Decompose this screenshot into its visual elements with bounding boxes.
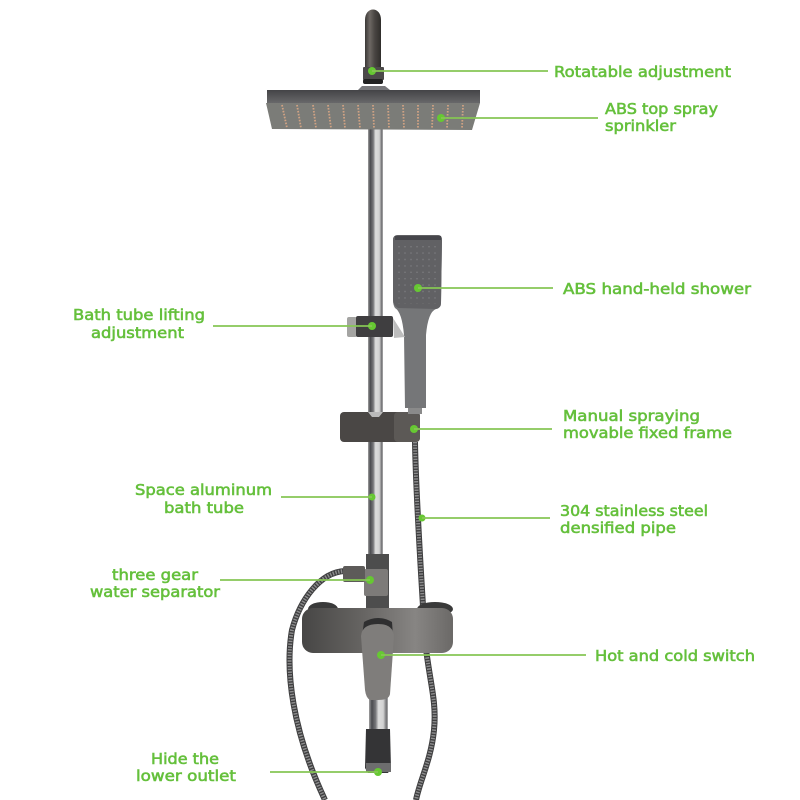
callout: movable fixed frame [410,407,732,442]
callout: top spray sprinkler: ABS top spray [605,100,718,118]
top spray head [266,90,480,130]
callout: stainless steel pipe: 304 stainless steel [560,502,708,520]
callout: hide the lower outlet: lower outlet [136,767,236,785]
callout: space aluminum bath tube [135,481,376,517]
callout: top spray sprinkler [437,100,718,135]
callout: rotatable adjustment: Rotatable adjustment [554,63,731,81]
callout: rotatable adjustment [368,63,731,81]
callout: hot and cold switch: Hot and cold switch [595,647,755,665]
callout: stainless steel pipe: densified pipe [560,519,676,537]
callout: stainless steel pipe [418,502,708,537]
shower column illustration [266,10,480,800]
hand shower [393,235,442,408]
callout: bath tube lifting adjustment: adjustment [91,324,184,342]
callout: top spray sprinkler: sprinkler [605,117,677,135]
mixer body [302,602,453,653]
arm collar [358,67,390,90]
callout: water separator [90,566,374,601]
callout: space aluminum bath tube: Space aluminum [135,481,272,499]
right hose [415,442,435,800]
callout: hand-held shower [414,280,752,298]
lifting clip [347,316,405,338]
callout: movable fixed frame: movable fixed frame [563,424,732,442]
callout: movable fixed frame: Manual spraying [563,407,700,425]
water separator [343,554,389,610]
callout: hot and cold switch [377,647,755,665]
callout: hand-held shower: ABS hand-held shower [563,280,752,298]
callout: bath tube lifting adjustment: Bath tube lifting [73,306,205,324]
callout: bath tube lifting adjustment [73,306,376,342]
callout: water separator: three gear [112,566,199,584]
shower arm [365,10,381,68]
central rod [368,128,383,608]
lower outlet pipe [365,695,391,773]
callout: hide the lower outlet: Hide the [151,750,219,768]
callout: water separator: water separator [90,583,221,601]
lever handle [361,618,394,700]
callout: hide the lower outlet [136,750,382,785]
movable frame [340,408,422,442]
callout: space aluminum bath tube: bath tube [164,499,244,517]
left hose [290,571,345,800]
